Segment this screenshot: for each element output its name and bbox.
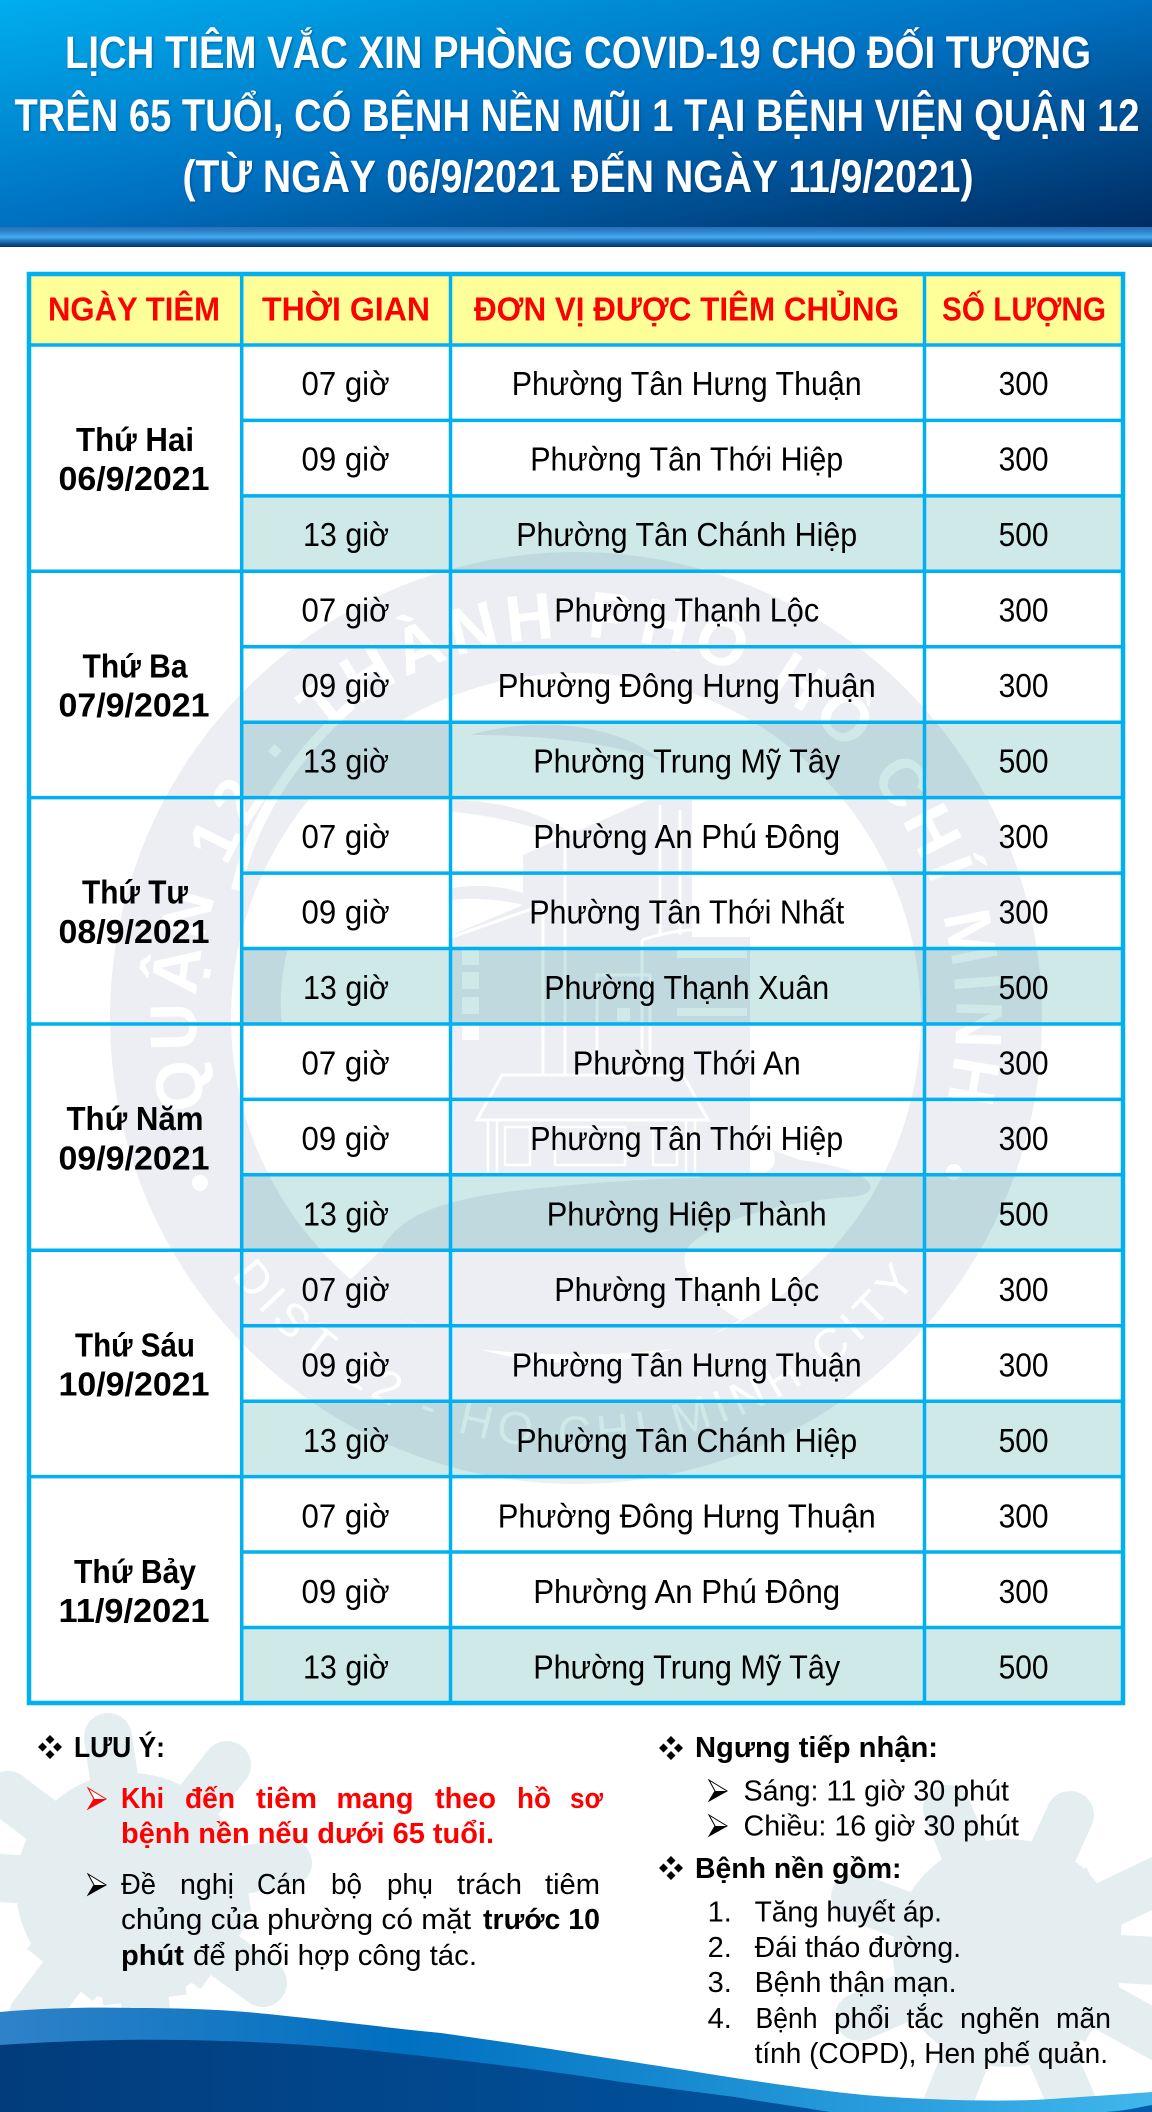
- black note: tiêm: [545, 1869, 600, 1901]
- disease list: 2.: [708, 1932, 732, 1964]
- row 12: 500: [999, 1196, 1049, 1232]
- row 3: Phường Tân Chánh Hiệp: [516, 516, 857, 553]
- row 9: [303, 969, 1049, 1006]
- row 9: 500: [999, 969, 1049, 1006]
- row 14: 09 giờ: [302, 1346, 390, 1384]
- icon: arrow bullet: [709, 1815, 727, 1836]
- date: Thứ Tư: [58, 874, 210, 950]
- black note: trách: [457, 1869, 522, 1901]
- icon: diamond bullet: [659, 1736, 683, 1760]
- table header labels: [48, 290, 1106, 328]
- row 11: 09 giờ: [302, 1120, 390, 1157]
- disease list: Bệnh thận mạn.: [755, 1967, 957, 1999]
- disease list: 1.: [708, 1897, 732, 1929]
- row 10: 07 giờ: [302, 1044, 390, 1082]
- date: Thứ Sáu: [58, 1326, 210, 1403]
- row 11: 300: [999, 1120, 1049, 1157]
- icon: arrow bullet: [709, 1780, 727, 1801]
- row 10: [302, 1044, 1049, 1082]
- date: Thứ Năm: [58, 1100, 210, 1176]
- row 8: 300: [999, 894, 1049, 930]
- row 16: [302, 1498, 1049, 1534]
- row 7: 300: [999, 818, 1049, 855]
- row 2: 09 giờ: [302, 440, 390, 478]
- row 9: 13 giờ: [303, 969, 389, 1006]
- title: (TỪ NGÀY 06/9/2021 ĐẾN NGÀY 11/9/2021): [182, 151, 974, 202]
- row 15: Phường Tân Chánh Hiệp: [516, 1422, 857, 1459]
- date: Thứ Ba: 07/9/2021: [58, 687, 210, 724]
- row 6: Phường Trung Mỹ Tây: [533, 742, 841, 779]
- date: Thứ Ba: Thứ Ba: [82, 647, 188, 684]
- red note: sơ: [570, 1783, 603, 1815]
- row 13: [302, 1271, 1049, 1308]
- row 14: [302, 1346, 1049, 1384]
- panel: lưu ý: [38, 1730, 603, 1972]
- disease list: phổi: [834, 2003, 890, 2035]
- row 18: [303, 1648, 1049, 1686]
- morning time: Sáng: 11 giờ 30 phút: [744, 1776, 1009, 1808]
- icon: virus right: [855, 1809, 1152, 2105]
- row 5: Phường Đông Hưng Thuận: [498, 667, 876, 704]
- row 8: 09 giờ: [302, 894, 390, 930]
- row 2: Phường Tân Thới Hiệp: [530, 440, 843, 478]
- row 7: 07 giờ: [302, 818, 390, 855]
- table header labels: ĐƠN VỊ ĐƯỢC TIÊM CHỦNG: [474, 291, 899, 328]
- table header labels: SỐ LƯỢNG: [942, 290, 1106, 328]
- row 17: [302, 1573, 1049, 1610]
- table highlighted rows: [242, 496, 1123, 1703]
- row 18: 13 giờ: [303, 1648, 389, 1686]
- row 7: Phường An Phú Đông: [533, 818, 840, 855]
- row 17: Phường An Phú Đông: [533, 1573, 840, 1610]
- panel: ngưng tiếp nhận: [659, 1732, 1019, 1843]
- row 10: Phường Thới An: [573, 1044, 801, 1082]
- row 11: [302, 1120, 1049, 1157]
- row 10: 300: [999, 1044, 1049, 1082]
- row 1: Phường Tân Hưng Thuận: [512, 365, 862, 402]
- row 13: 300: [999, 1271, 1049, 1308]
- red note: theo: [435, 1783, 496, 1815]
- icon: black arrow bullet: [88, 1874, 106, 1895]
- date: Thứ Tư: Thứ Tư: [82, 874, 188, 911]
- watermark buildings: [452, 800, 750, 1177]
- row 4: 300: [999, 591, 1049, 628]
- date: Thứ Hai: 06/9/2021: [58, 460, 210, 497]
- row 18: Phường Trung Mỹ Tây: [533, 1648, 841, 1686]
- disease list: 3.: [708, 1967, 732, 1999]
- row 14: Phường Tân Hưng Thuận: [512, 1346, 862, 1384]
- disease list: tắc: [906, 2002, 944, 2035]
- row 12: Phường Hiệp Thành: [547, 1196, 827, 1232]
- row 8: Phường Tân Thới Nhất: [529, 894, 844, 930]
- row 6: 500: [999, 742, 1049, 779]
- row 8: [302, 894, 1049, 930]
- disease list: Đái tháo đường.: [755, 1932, 961, 1964]
- row 1: 300: [999, 365, 1049, 402]
- red note: bệnh nền nếu dưới 65 tuổi.: [121, 1818, 494, 1850]
- row 4: Phường Thạnh Lộc: [554, 591, 819, 628]
- row 16: Phường Đông Hưng Thuận: [498, 1498, 876, 1534]
- date: Thứ Tư: 08/9/2021: [58, 913, 210, 950]
- row 9: Phường Thạnh Xuân: [544, 969, 829, 1006]
- row 1: [302, 365, 1049, 402]
- black note: trước 10: [483, 1904, 600, 1936]
- title: [14, 27, 1140, 202]
- row 16: 300: [999, 1498, 1049, 1534]
- disease list: nghẽn: [960, 2003, 1040, 2035]
- row 3: [303, 516, 1049, 553]
- black note: Đề: [121, 1869, 156, 1901]
- row 16: 07 giờ: [302, 1498, 390, 1534]
- black note: Cán: [257, 1869, 306, 1901]
- header banner: [0, 0, 1152, 228]
- black note: nghị: [180, 1869, 234, 1901]
- date: Thứ Bảy: [58, 1553, 210, 1629]
- disease list: 4.: [708, 2003, 732, 2035]
- panel: bệnh nền gồm: [659, 1853, 1111, 2070]
- disease list: Bệnh: [756, 2003, 818, 2035]
- red note: đến: [185, 1783, 235, 1815]
- red note: tiêm: [256, 1783, 317, 1815]
- row 11: Phường Tân Thới Hiệp: [530, 1120, 843, 1157]
- row 15: 13 giờ: [303, 1422, 389, 1459]
- icon: red arrow bullet: [88, 1788, 106, 1809]
- red note: mang: [336, 1783, 414, 1815]
- watermark lower text: DIST 12 - HO CHI MINH CITY: [234, 1258, 908, 1448]
- row 3: 500: [999, 516, 1049, 553]
- row 13: Phường Thạnh Lộc: [554, 1271, 819, 1308]
- date: Thứ Năm: 09/9/2021: [58, 1139, 210, 1176]
- icon: virus left: [0, 1737, 288, 2040]
- row 17: 09 giờ: [302, 1573, 390, 1610]
- watermark dots: [192, 1164, 962, 1191]
- date: Thứ Năm: Thứ Năm: [66, 1100, 204, 1137]
- black note: phút: [121, 1940, 184, 1972]
- black note: bộ: [331, 1869, 362, 1901]
- header strip: [0, 227, 1152, 247]
- row 5: 300: [999, 667, 1049, 704]
- black note: chủng của phường có mặt: [121, 1904, 471, 1936]
- table header row background: [29, 274, 1123, 345]
- black note: [121, 1869, 600, 1972]
- date: Thứ Sáu: 10/9/2021: [58, 1366, 210, 1403]
- row 15: 500: [999, 1422, 1049, 1459]
- heading: lưu ý: LƯU Ý:: [74, 1730, 165, 1764]
- row 18: 500: [999, 1648, 1049, 1686]
- row 13: 07 giờ: [302, 1271, 390, 1308]
- row 4: 07 giờ: [302, 591, 390, 628]
- date: Thứ Hai: [58, 421, 210, 497]
- row 7: [302, 818, 1049, 855]
- disease list: tính (COPD), Hen phế quản.: [755, 2038, 1108, 2070]
- date: Thứ Bảy: 11/9/2021: [58, 1592, 210, 1629]
- disease list: [708, 1897, 1111, 2070]
- row 6: [303, 742, 1049, 779]
- disease list: Tăng huyết áp.: [755, 1897, 942, 1929]
- disease list: mãn: [1056, 2003, 1111, 2035]
- row 17: 300: [999, 1573, 1049, 1610]
- row 5: 09 giờ: [302, 667, 390, 704]
- row 2: [302, 440, 1049, 478]
- heading: bệnh nền gồm: Bệnh nền gồm:: [695, 1853, 902, 1885]
- row 14: 300: [999, 1346, 1049, 1384]
- date: Thứ Ba: [58, 647, 210, 724]
- date: Thứ Sáu: Thứ Sáu: [75, 1326, 195, 1363]
- date: Thứ Bảy: Thứ Bảy: [74, 1553, 197, 1590]
- table header labels: NGÀY TIÊM: [48, 291, 220, 328]
- row 6: 13 giờ: [303, 742, 389, 779]
- bottom wave light: [0, 2008, 1152, 2112]
- row 1: 07 giờ: [302, 365, 390, 402]
- red note: hồ: [517, 1783, 551, 1815]
- afternoon time: Chiều: 16 giờ 30 phút: [744, 1811, 1019, 1843]
- row 5: [302, 667, 1049, 704]
- icon: diamond bullet: [659, 1856, 683, 1880]
- black note: phụ: [387, 1869, 433, 1901]
- table header labels: THỜI GIAN: [262, 291, 430, 328]
- table grid lines: [29, 274, 1123, 1703]
- row 12: 13 giờ: [303, 1196, 389, 1232]
- black note: để phối hợp công tác.: [193, 1940, 477, 1972]
- watermark ring text: QUẬN 12 · THÀNH PHỐ HỒ CHÍ MINH: [140, 592, 1002, 1109]
- watermark: district 12 emblem: [110, 552, 1042, 1484]
- date: Thứ Hai: Thứ Hai: [76, 421, 194, 458]
- row 2: 300: [999, 440, 1049, 478]
- red note: Khi: [121, 1783, 164, 1815]
- row 15: [303, 1422, 1049, 1459]
- icon: diamond bullet: [38, 1735, 62, 1759]
- row 4: [302, 591, 1049, 628]
- row 3: 13 giờ: [303, 516, 389, 553]
- row 12: [303, 1196, 1049, 1232]
- heading: ngưng tiếp nhận: Ngưng tiếp nhận:: [695, 1732, 938, 1764]
- bottom wave dark: [0, 2040, 1152, 2112]
- red note: [121, 1783, 603, 1850]
